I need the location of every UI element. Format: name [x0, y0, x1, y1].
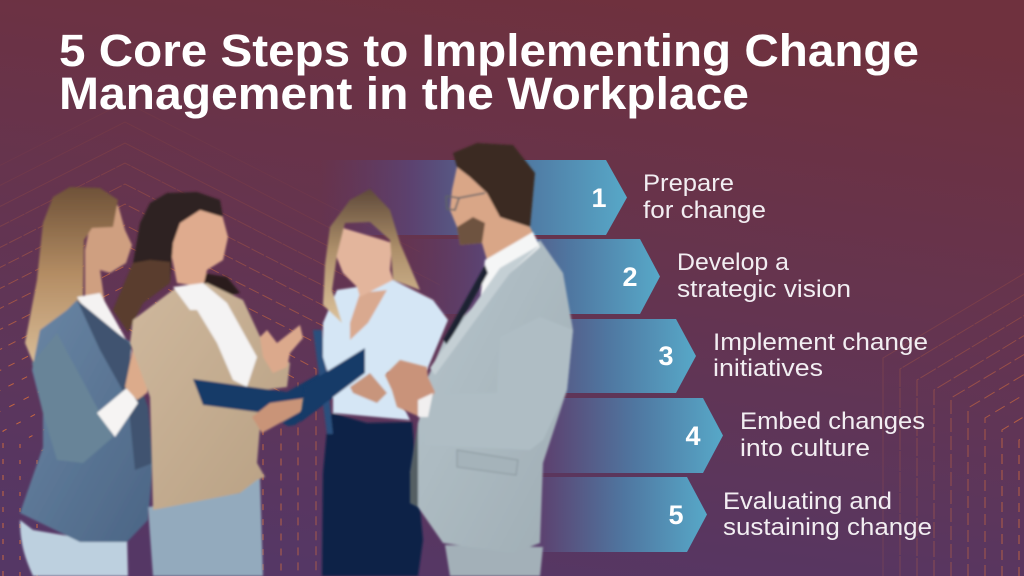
step 4 label: into culture: [740, 435, 870, 462]
arrow 3: [440, 319, 696, 393]
arrow 4: 4: [685, 421, 701, 451]
step 4 label: Embed changes: [740, 408, 925, 435]
watch: [418, 393, 433, 417]
arrow 3: 3: [658, 341, 674, 371]
person: man in grey suit: [385, 143, 573, 576]
person: woman in beige blazer: [113, 192, 365, 576]
step 1 label: for change: [643, 197, 766, 224]
hair: [113, 192, 223, 332]
collar: [480, 232, 540, 300]
hair: [323, 189, 420, 323]
step 2 label: [677, 249, 851, 303]
chest: [350, 290, 387, 340]
arrow 1: [320, 160, 627, 235]
left chevron line pattern: [0, 102, 440, 576]
pocket flap: [457, 450, 518, 475]
blouse: [323, 280, 448, 420]
sleeve: [425, 317, 573, 450]
glasses: [446, 193, 485, 210]
lapel: [430, 245, 540, 375]
hair: [25, 187, 118, 362]
step 3 label: initiatives: [713, 355, 823, 382]
arrow 5: 5: [668, 500, 684, 530]
step 3 label: [713, 329, 928, 382]
beard: [457, 217, 485, 245]
jacket: [410, 240, 573, 553]
step 2 label: strategic vision: [677, 276, 851, 303]
title: Management in the Workplace: [59, 68, 749, 119]
title: 5 Core Steps to Implementing Change: [59, 25, 919, 76]
hand over folder: [252, 397, 315, 433]
person: woman in blue blazer: [20, 187, 163, 576]
step 5 label: sustaining change: [723, 514, 932, 541]
hair lower strands: [113, 260, 170, 332]
sleeve: [32, 333, 113, 463]
right line pattern: [883, 270, 1024, 576]
face: [333, 225, 393, 297]
step 2 label: Develop a: [677, 249, 790, 276]
tie: [443, 265, 488, 345]
arrow 5: [470, 477, 707, 552]
back folder: [313, 330, 333, 434]
arrow 1: 1: [591, 183, 607, 213]
arrow 4: [470, 398, 723, 473]
step 5 label: Evaluating and: [723, 488, 892, 515]
hand: [350, 373, 387, 403]
arrow 2: 2: [622, 262, 638, 292]
step 4 label: [740, 408, 925, 462]
trousers: [445, 545, 543, 576]
hands: [385, 360, 435, 417]
step 5 label: [723, 488, 932, 541]
step 1 label: Prepare: [643, 170, 734, 197]
step 3 label: Implement change: [713, 329, 928, 356]
trousers: [148, 453, 263, 576]
person: woman in white blouse: [300, 189, 448, 576]
step 1 label: [643, 170, 766, 224]
title: [59, 25, 919, 119]
trousers: [20, 520, 128, 576]
neck and face: [85, 205, 132, 305]
face: [450, 167, 533, 260]
blazer: [20, 300, 153, 542]
hair: [453, 143, 535, 227]
jacket edge shadow: [410, 423, 418, 507]
cuff: [97, 387, 138, 437]
hand: [125, 333, 163, 400]
shirt: [173, 283, 257, 387]
blazer: [130, 283, 290, 510]
front folder: [300, 348, 365, 422]
arrow 2: [400, 239, 660, 314]
raised hand: [260, 325, 303, 373]
back hair: [203, 273, 240, 297]
skirt: [322, 413, 423, 576]
folder: [193, 348, 365, 426]
shirt: [77, 293, 132, 360]
face and neck: [170, 207, 228, 287]
lapel shadow: [77, 300, 153, 470]
